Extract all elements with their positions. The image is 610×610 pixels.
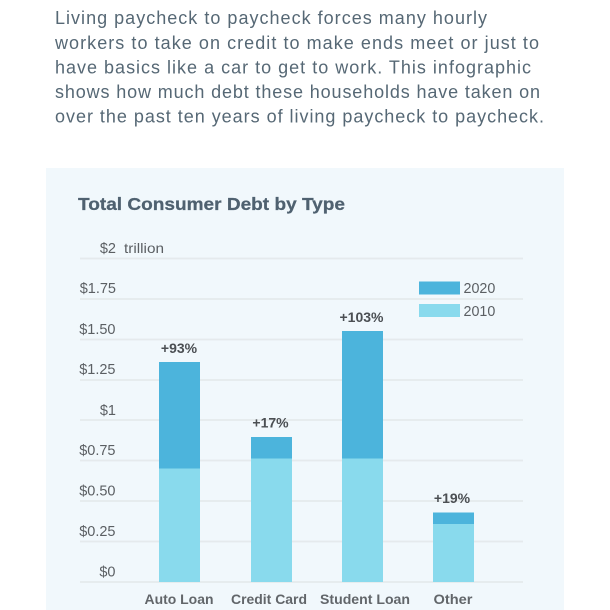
y axis labels: $0 — [99, 564, 116, 580]
y axis labels: $1.50 — [79, 322, 116, 338]
percent change labels — [161, 309, 471, 506]
legend: 2010 — [464, 304, 495, 320]
y axis unit label: trillion — [124, 240, 164, 256]
y axis labels: $0.50 — [79, 484, 116, 500]
percent change labels: +93% — [161, 340, 198, 356]
bar: credit card — [251, 437, 292, 582]
category labels: Other — [434, 592, 473, 607]
bar: other — [433, 512, 474, 582]
intro text block: Living paycheck to paycheck forces many hourly — [55, 8, 487, 28]
y axis labels: $1 — [100, 403, 116, 419]
category labels: Student Loan — [320, 592, 410, 607]
intro text block: shows how much debt these households have taken on — [55, 82, 540, 102]
y axis labels: $1.25 — [79, 362, 116, 378]
y axis labels — [79, 241, 116, 580]
bar: auto loan — [159, 362, 200, 582]
category labels: Auto Loan — [144, 592, 214, 607]
chart heading: Total Consumer Debt by Type — [78, 194, 345, 214]
intro text block — [54, 8, 544, 126]
category labels: Credit Card — [231, 592, 307, 607]
percent change labels: +103% — [340, 309, 384, 325]
intro text block: have basics like a car to get to work. This infographic — [55, 58, 531, 78]
y axis labels: $1.75 — [80, 281, 116, 297]
legend: 2020 — [464, 281, 495, 297]
y axis labels: $2 — [100, 241, 116, 257]
y axis labels: $0.25 — [79, 524, 116, 540]
category labels — [144, 592, 473, 607]
intro text block: workers to take on credit to make ends meet or just to — [54, 33, 539, 53]
intro text block: over the past ten years of living paycheck to paycheck. — [55, 106, 544, 126]
legend — [419, 281, 495, 320]
y axis labels: $0.75 — [79, 443, 116, 459]
percent change labels: +17% — [252, 414, 289, 430]
percent change labels: +19% — [434, 490, 471, 506]
bar: student loan — [342, 331, 383, 582]
